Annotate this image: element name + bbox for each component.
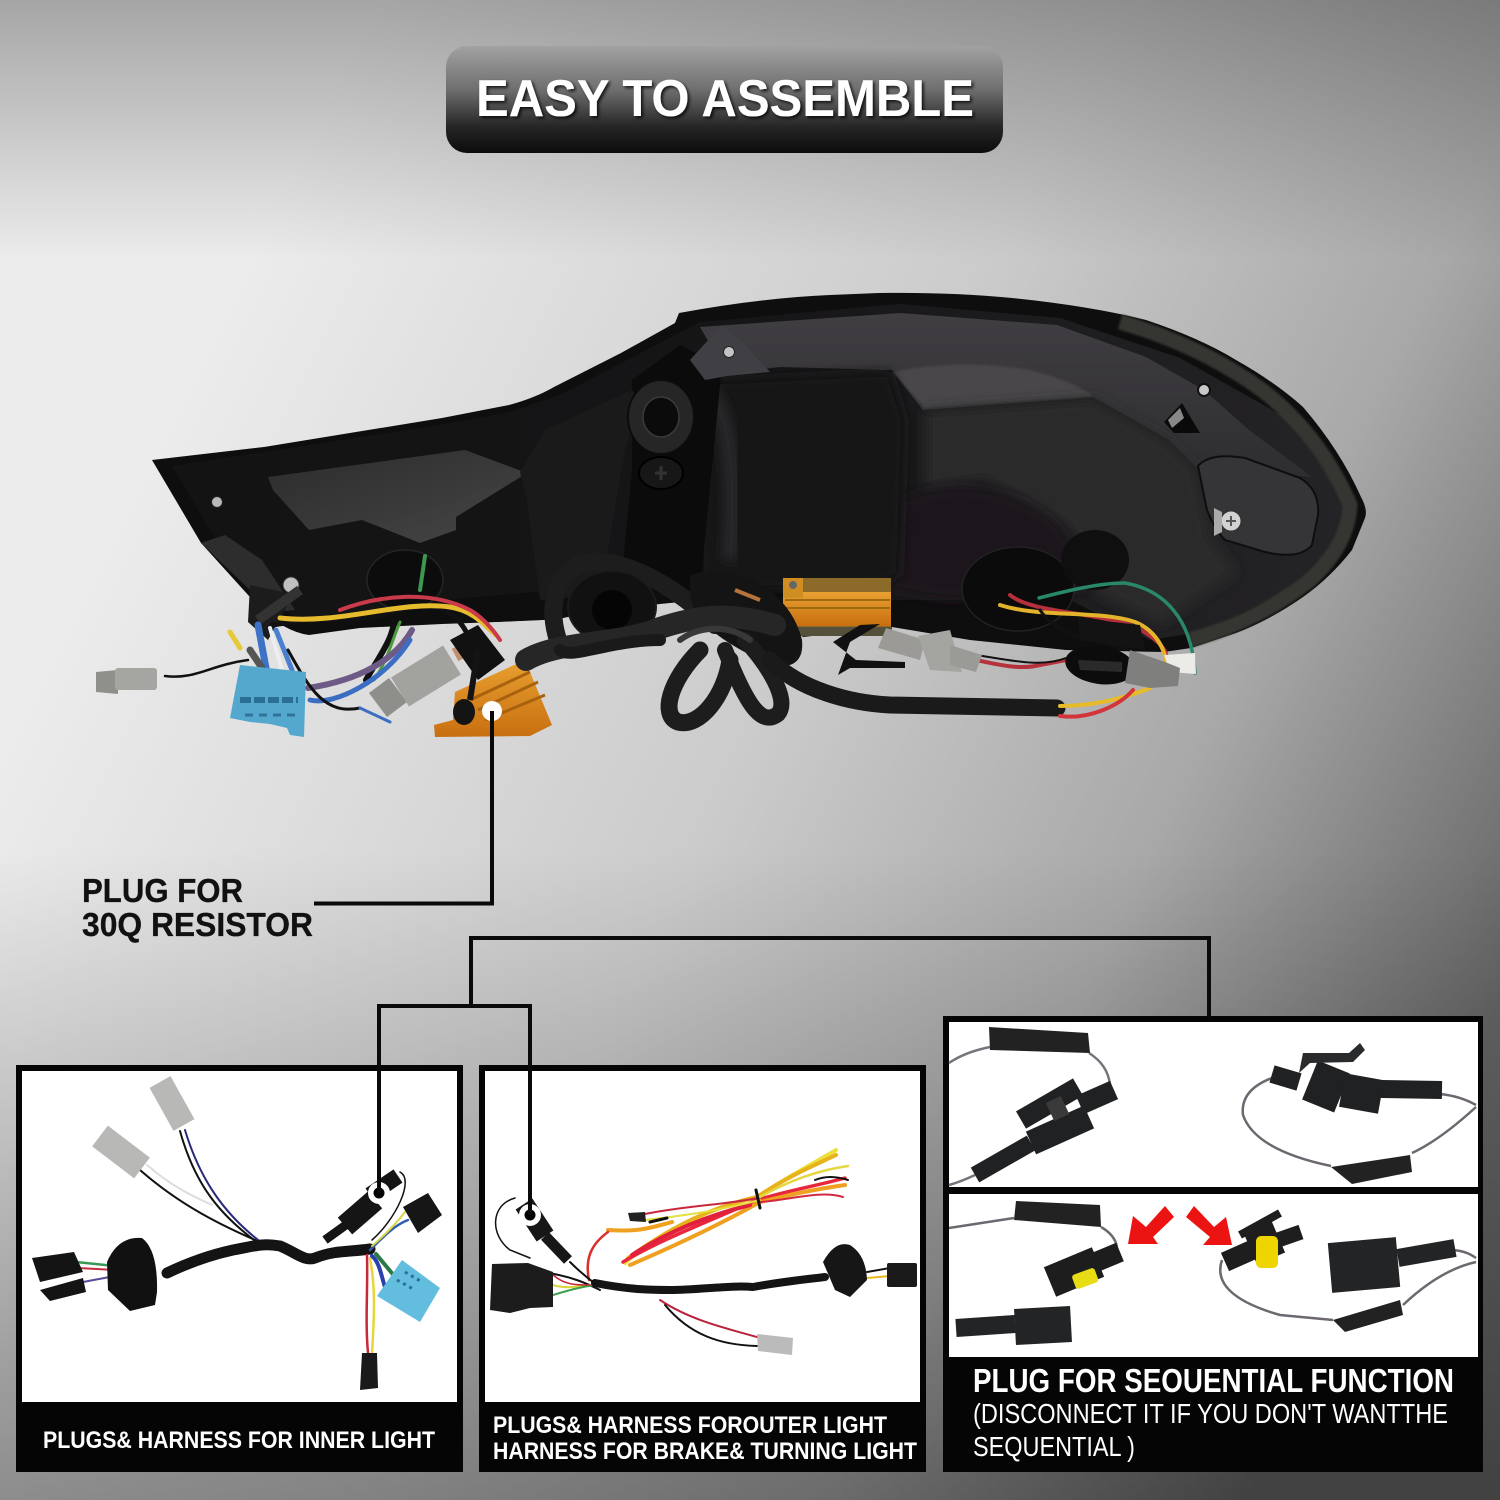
inner harness blue connector bbox=[377, 1260, 440, 1322]
callout text: 30Q RESISTOR bbox=[82, 906, 313, 943]
left black connector block bbox=[248, 585, 300, 640]
white tab bbox=[1164, 653, 1196, 674]
inner harness center plug bbox=[325, 1176, 398, 1240]
yellow and red wire bundle bbox=[496, 1150, 890, 1346]
callout line bbox=[314, 711, 492, 904]
gray plug assembly left bbox=[378, 648, 468, 705]
panel image area bbox=[22, 1071, 457, 1402]
inner harness gray plugs bbox=[100, 1082, 184, 1168]
bright bottom strip reflection bbox=[445, 621, 554, 626]
panel: outer light harness bbox=[479, 1065, 926, 1472]
inner harness right connector bbox=[403, 1193, 442, 1233]
panel: inner light harness bbox=[16, 1065, 463, 1472]
connected plug left bbox=[975, 1087, 1114, 1175]
black clip bbox=[833, 624, 905, 675]
left gold resistor bbox=[434, 660, 552, 737]
callout marker bbox=[482, 701, 502, 721]
yellow seal right bbox=[1256, 1236, 1278, 1268]
left lighter wedge bbox=[268, 450, 527, 543]
open plug lower left bbox=[956, 1324, 1071, 1328]
connected plug right bbox=[1272, 1043, 1442, 1097]
inner harness left plugs bbox=[32, 1252, 86, 1301]
small gray plug left bbox=[96, 668, 157, 694]
housing shell bbox=[152, 293, 1366, 652]
title text: EASY TO ASSEMBLE bbox=[476, 70, 974, 128]
callout: plug for resistor bbox=[82, 701, 502, 943]
connector lines bbox=[379, 938, 1209, 1215]
blue connector pins bbox=[397, 1272, 422, 1290]
caption: PLUGS& HARNESS FOR INNER LIGHT bbox=[43, 1427, 435, 1454]
connector marker bbox=[519, 1204, 541, 1226]
top image area bbox=[949, 1022, 1478, 1187]
outer harness socket bbox=[823, 1244, 867, 1297]
outer harness inline plug bbox=[524, 1204, 568, 1260]
outer harness small connector bbox=[628, 1212, 646, 1222]
caption bbox=[973, 1362, 1454, 1462]
caption: HARNESS FOR BRAKE& TURNING LIGHT bbox=[493, 1438, 917, 1465]
outer harness end plug bbox=[887, 1263, 917, 1287]
heat shrink wraps lower bbox=[1014, 1201, 1101, 1227]
black clip on lamp bbox=[1078, 618, 1145, 650]
right wires bbox=[976, 583, 1195, 717]
lower image area bbox=[949, 1194, 1478, 1357]
resistor connector bbox=[450, 625, 505, 700]
callout text: PLUG FOR bbox=[82, 872, 243, 909]
open plug mid right bbox=[1225, 1213, 1301, 1262]
black cable harness bbox=[526, 562, 1057, 723]
red arrow left bbox=[1128, 1206, 1174, 1244]
connector marker bbox=[368, 1182, 390, 1204]
open plug far right bbox=[1330, 1248, 1455, 1268]
left foot bbox=[201, 535, 295, 612]
product: tail light housing with wiring bbox=[96, 293, 1366, 737]
panel: sequential plug bbox=[943, 1016, 1483, 1472]
blue connector bbox=[230, 665, 306, 737]
upper lighter shoulder bbox=[700, 313, 1312, 477]
outer harness connector block bbox=[490, 1263, 553, 1313]
inner harness wires bbox=[76, 1130, 408, 1353]
outer harness gray plug bbox=[757, 1334, 793, 1355]
caption: SEQUENTIAL ) bbox=[973, 1431, 1135, 1462]
dark central recess bbox=[700, 372, 905, 590]
bulb sockets bbox=[367, 530, 1129, 631]
inner harness small plug bbox=[360, 1353, 378, 1390]
caption: PLUGS& HARNESS FOROUTER LIGHT bbox=[493, 1412, 887, 1439]
red arrow right bbox=[1186, 1206, 1232, 1245]
right mount plate bbox=[1198, 456, 1318, 555]
black plug right bbox=[1063, 641, 1180, 689]
grommet bbox=[628, 380, 694, 489]
heat shrink wraps bbox=[989, 1027, 1090, 1053]
side channel bbox=[620, 345, 722, 595]
rim highlight on right edge bbox=[1120, 322, 1350, 640]
open plug upper left bbox=[1050, 1252, 1120, 1282]
gray plug right bbox=[878, 628, 982, 672]
right gold resistor bbox=[783, 578, 892, 636]
panel image area bbox=[485, 1071, 920, 1402]
screws and bolts bbox=[212, 346, 1241, 593]
yellow seal left bbox=[1071, 1267, 1099, 1290]
title badge bbox=[446, 46, 1003, 153]
inner harness socket bbox=[107, 1238, 157, 1311]
gold wire tip bbox=[735, 590, 760, 600]
left wires bbox=[165, 556, 500, 722]
